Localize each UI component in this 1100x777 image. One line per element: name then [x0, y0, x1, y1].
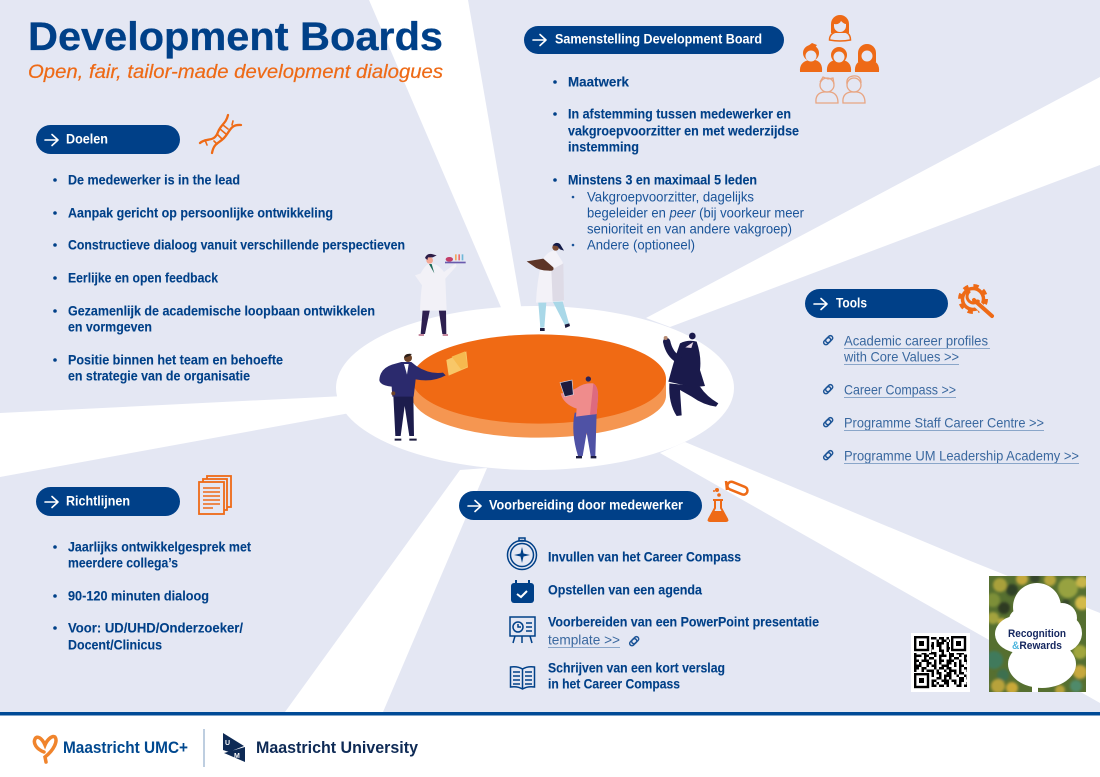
pill heading: Doelen [36, 125, 180, 154]
bullet list: Doelen: De medewerker is in the lead [68, 172, 240, 188]
Recognition and Rewards tree image: &Rewards [1012, 640, 1062, 652]
bullet list: Samenstelling: In afstemming tussen medewerker en [568, 106, 791, 122]
bullet list: Doelen: Eerlijke en open feedback [68, 270, 218, 286]
pill heading: Samenstelling: Samenstelling Development Board [555, 31, 762, 47]
bullet list: Doelen: Aanpak gericht op persoonlijke ontwikkeling [68, 205, 333, 221]
panel: Doelen [36, 115, 405, 384]
step list: in het Career Compass [548, 676, 680, 692]
panel: Richtlijnen [36, 476, 251, 653]
central table illustration [379, 243, 718, 458]
link list: Tools: Programme UM Leadership Academy >> [844, 448, 1079, 464]
pill heading: Tools [805, 289, 948, 318]
step list [548, 549, 819, 692]
figure: man in dark robe [664, 333, 718, 416]
bullet list: Doelen: Positie binnen het team en behoefte [68, 352, 283, 368]
step list: Opstellen van een agenda [548, 582, 702, 598]
logo: Maastricht UMC+: Maastricht UMC+ [63, 739, 188, 757]
bullet list: Richtlijnen: 90-120 minuten dialoog [68, 588, 209, 604]
bullet list: Doelen [53, 172, 405, 384]
icon: flask and test tube [708, 481, 749, 521]
logo: Maastricht University [223, 733, 419, 762]
step list: Voorbereiden van een PowerPoint presentatie [548, 614, 819, 630]
bullet list: Samenstelling [553, 74, 804, 253]
bullet list: Samenstelling: vakgroepvoorzitter en met wederzijdse [568, 123, 799, 139]
bullet list: Doelen: en vormgeven [68, 319, 152, 335]
pill heading: Samenstelling [524, 26, 784, 54]
bullet list: Samenstelling: begeleider en peer (bij voorkeur meer [587, 205, 804, 221]
bullet list: Samenstelling: Maatwerk [568, 74, 629, 90]
step list: template >> [548, 632, 620, 648]
pill heading: Voorbereiding: Voorbereiding door medewerker [489, 497, 683, 513]
panel: Samenstelling Development Board [524, 15, 879, 253]
bullet list: Doelen: Constructieve dialoog vanuit verschillende perspectieven [68, 237, 405, 253]
orange table [412, 334, 666, 438]
title: Development Boards [28, 15, 443, 59]
bullet list: Samenstelling: instemming [568, 139, 639, 155]
QR code [911, 633, 970, 692]
panel: Tools [805, 286, 1079, 464]
link list: Tools: with Core Values >> [843, 349, 959, 365]
logo: Maastricht University: M [234, 753, 240, 760]
figure: man with folder [379, 351, 468, 441]
link list: Tools: Programme Staff Career Centre >> [844, 415, 1044, 431]
link list: Tools: Academic career profiles [844, 333, 988, 349]
title [28, 15, 443, 83]
Recognition and Rewards tree image: Recognition [1008, 628, 1066, 640]
bullet list: Samenstelling: Vakgroepvoorzitter, dagelijks [587, 189, 754, 205]
bullet list: Samenstelling: Minstens 3 en maximaal 5 leden [568, 172, 757, 188]
pill heading: Doelen: Doelen [66, 131, 108, 147]
title: Open, fair, tailor-made development dialogues [28, 61, 443, 83]
footer [0, 712, 1100, 777]
bullet list: Richtlijnen: meerdere collega’s [68, 555, 178, 571]
bullet list: Doelen: Gezamenlijk de academische loopbaan ontwikkelen [68, 303, 375, 319]
pill heading: Voorbereiding [459, 491, 702, 520]
bullet list: Samenstelling: Andere (optioneel) [587, 237, 695, 253]
icon: presentation board [510, 617, 535, 643]
figure: person with tablet [560, 376, 598, 458]
logo: Maastricht UMC+ [34, 737, 188, 762]
step list: Schrijven van een kort verslag [548, 660, 725, 676]
bullet list: Samenstelling: senioriteit en van andere vakgroep) [587, 221, 792, 237]
bullet list: Richtlijnen: Voor: UD/UHD/Onderzoeker/ [68, 620, 243, 636]
pill heading: Tools: Tools [836, 295, 867, 311]
link list: Tools [823, 333, 1079, 464]
figure: scientist with crossed arms [527, 243, 570, 331]
icon: gear and wrench [960, 286, 992, 317]
icon: open book [510, 667, 534, 689]
logo: Maastricht University: U [225, 740, 230, 747]
icon: compass [508, 538, 536, 570]
bullet list: Richtlijnen: Jaarlijks ontwikkelgesprek met [68, 539, 251, 555]
panel: Voorbereiding door medewerker [459, 481, 819, 692]
icon: calendar [511, 580, 534, 603]
pill heading: Richtlijnen: Richtlijnen [66, 493, 130, 509]
bullet list: Richtlijnen [53, 539, 251, 653]
Recognition and Rewards tree image [989, 576, 1086, 692]
step list: Invullen van het Career Compass [548, 549, 741, 565]
pill heading: Richtlijnen [36, 487, 180, 516]
logo: Maastricht University: Maastricht University [256, 739, 419, 757]
icon: people group [800, 15, 879, 103]
bullet list: Doelen: en strategie van de organisatie [68, 368, 250, 384]
icon: documents [199, 476, 231, 514]
link list: Tools: Career Compass >> [844, 382, 956, 398]
icon: DNA helix [200, 115, 241, 153]
bullet list: Richtlijnen: Docent/Clinicus [68, 637, 162, 653]
figure: scientist with tray [415, 254, 466, 336]
